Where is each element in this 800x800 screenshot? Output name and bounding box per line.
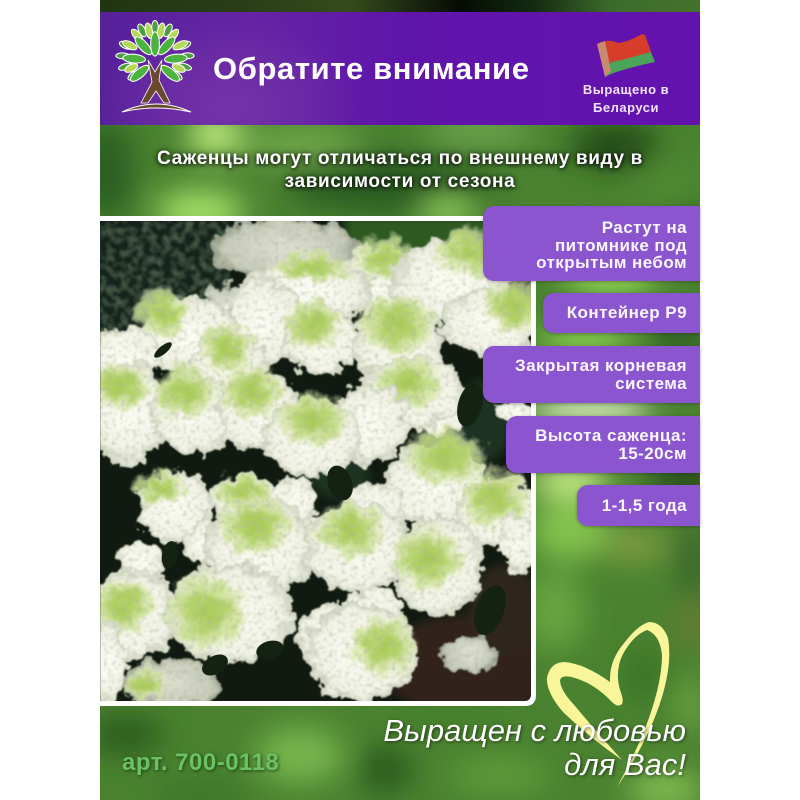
feature: grown outdoors: питомнике под: [555, 236, 687, 254]
article number: арт. 700-0118: [122, 749, 279, 776]
feature: grown outdoors: Растут на: [602, 218, 687, 237]
feature: seedling height: 15-20см: [618, 444, 687, 462]
feature: seedling height: [506, 416, 700, 473]
feature: age: 1-1,5 года: [602, 496, 687, 515]
photo frame: [100, 216, 536, 706]
photo: hydrangea bush: [100, 216, 536, 706]
feature: age: [577, 485, 700, 526]
notice text: зависимости от сезона: [285, 171, 515, 192]
feature: closed root system: [483, 346, 700, 403]
feature: container: [543, 293, 700, 333]
notice text: [154, 147, 645, 192]
dark leaves: [152, 340, 512, 680]
feature: container: Контейнер Р9: [567, 303, 687, 322]
flag caption: Беларуси: [593, 100, 659, 115]
icon: yellow heart: [546, 622, 670, 786]
hedge: [100, 221, 230, 346]
header band: [100, 12, 700, 125]
hydrangea flower heads: [86, 216, 548, 710]
feature: seedling height: Высота саженца:: [535, 426, 687, 445]
feature: closed root system: система: [615, 374, 687, 392]
slogan: [383, 713, 688, 782]
blurred green background: [100, 125, 700, 800]
feature: grown outdoors: [483, 206, 700, 281]
flag caption: [583, 82, 669, 115]
flag caption: Выращено в: [583, 82, 669, 97]
feature: grown outdoors: открытым небом: [536, 253, 687, 272]
slogan: для Вас!: [564, 747, 686, 782]
top dark strip: [100, 0, 700, 12]
logo: tree: [115, 20, 195, 112]
feature: closed root system: Закрытая корневая: [515, 356, 687, 375]
notice text: Саженцы могут отличаться по внешнему виду в: [157, 148, 643, 169]
flag of Belarus: [597, 34, 655, 77]
slogan: Выращен с любовью: [383, 713, 686, 748]
title: Обратите внимание: [213, 51, 530, 86]
